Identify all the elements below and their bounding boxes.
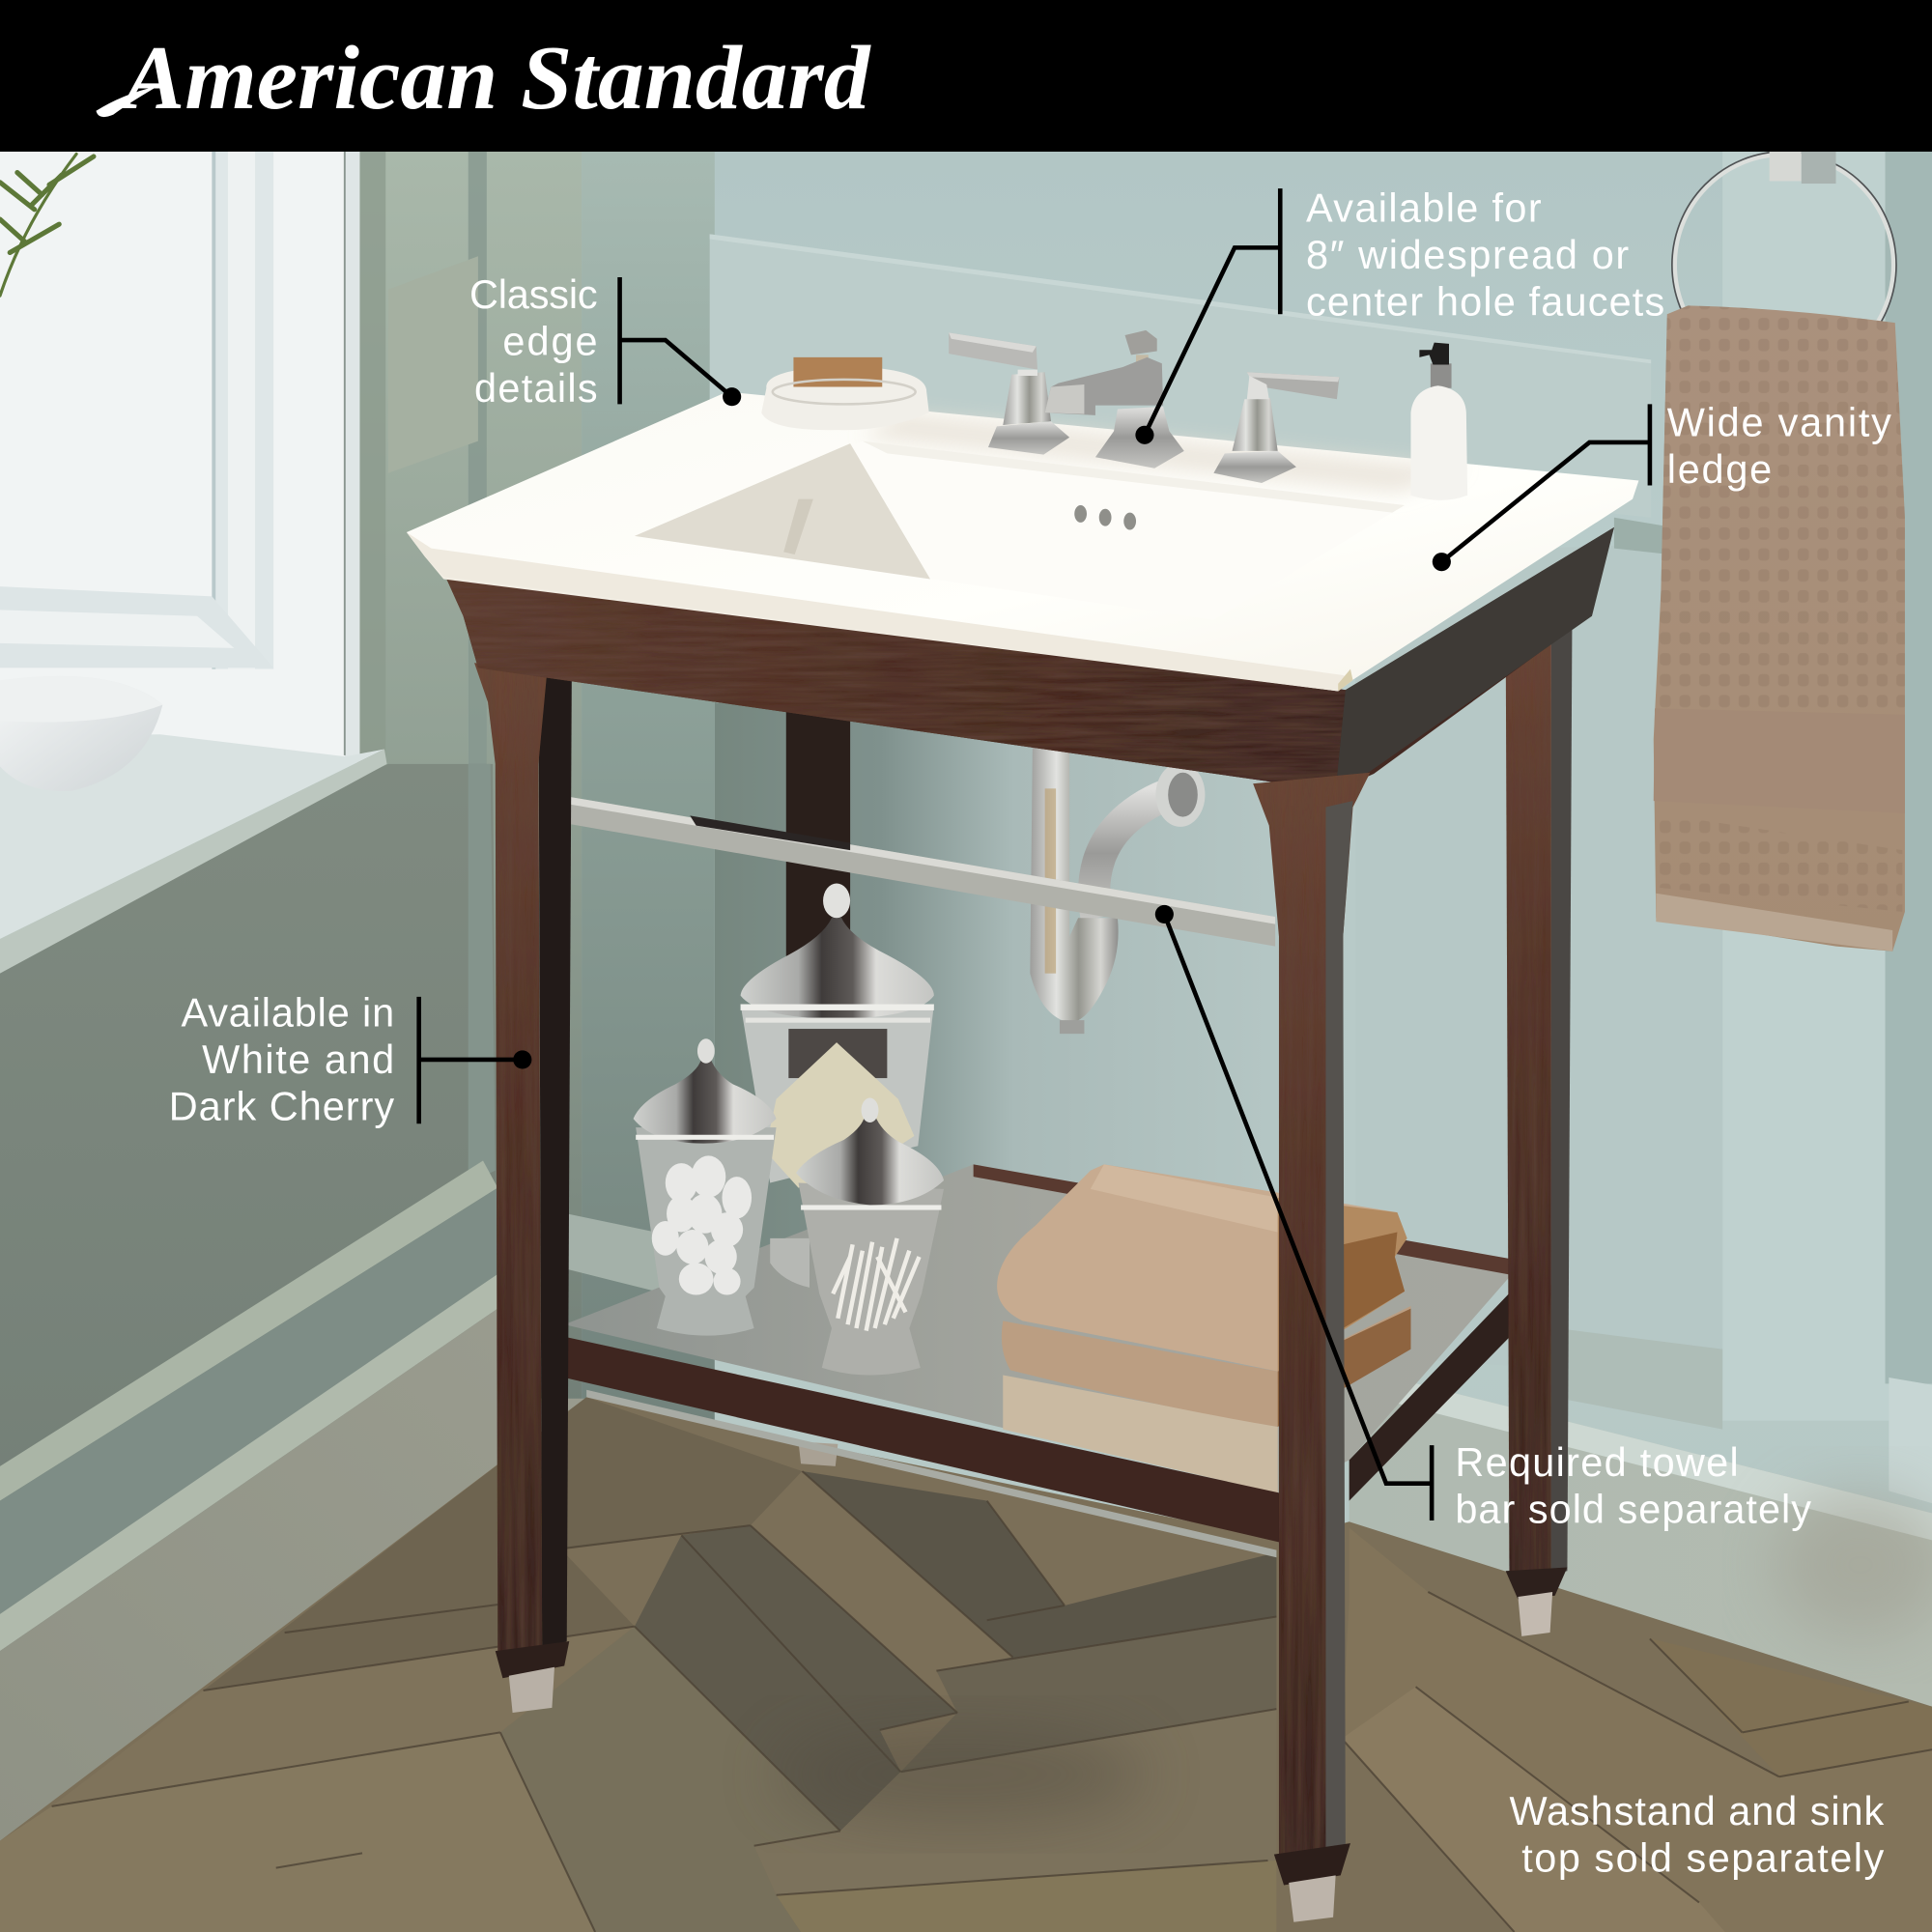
wall baseboard right: [1350, 1324, 1932, 1707]
front-right leg: [1253, 773, 1370, 1922]
panel: sink top: [407, 392, 1638, 692]
callout: finish colours: Dark Cherry: [169, 1083, 394, 1128]
note: sold separately: Washstand and sink: [1509, 1788, 1885, 1833]
note: sold separately: [1509, 1788, 1885, 1880]
callout: finish colours: [169, 989, 531, 1128]
hanging towel: [1654, 305, 1905, 952]
soap bottle: [1410, 343, 1467, 500]
callout: faucet options: Available for: [1306, 185, 1542, 231]
soap dish: [761, 357, 929, 430]
icon: bowl: [0, 676, 162, 791]
shelf: [549, 1164, 1525, 1557]
title: American Standard logo: American Standard: [118, 28, 871, 128]
icon: plant: [0, 154, 94, 296]
spout: [1045, 330, 1184, 469]
floor herringbone: [0, 1397, 1932, 1932]
callout: faucet options: center hole faucets: [1306, 279, 1664, 325]
jar: cotton swabs: [796, 1097, 944, 1375]
callout: classic edge details: Classic: [469, 271, 598, 317]
title: American Standard logo: [0, 0, 1932, 152]
jars and towels on shelf: [634, 884, 1410, 1427]
callout: classic edge details: details: [474, 365, 598, 411]
callout: classic edge details: [469, 271, 741, 411]
towels: [997, 1164, 1410, 1427]
callout: faucet options: [1135, 185, 1664, 444]
jar: cotton balls: [634, 1038, 777, 1336]
back-left leg: [786, 708, 850, 1466]
callout: finish colours: Available in: [182, 990, 394, 1036]
jar: large: [741, 884, 934, 1288]
towel bar: [545, 781, 1275, 947]
panel: wooden apron: [441, 527, 1614, 791]
panel: window sill: [0, 676, 387, 974]
callout: wide vanity ledge: ledge: [1667, 446, 1772, 492]
left handle: [949, 332, 1069, 455]
callout: finish colours: White and: [202, 1037, 394, 1082]
callout: faucet options: 8″ widespread or: [1306, 232, 1629, 277]
callout: wide vanity ledge: Wide vanity: [1667, 400, 1891, 445]
towel ring: [1672, 152, 1896, 379]
cotton-swab packet: [765, 1042, 914, 1188]
callout: wide vanity ledge: [1433, 400, 1891, 571]
right handle: [1213, 372, 1339, 483]
back-right leg: [1506, 604, 1573, 1636]
panel: lower-left wall: [0, 764, 715, 1932]
callout: towel bar: [1155, 905, 1811, 1532]
panel: window: [0, 152, 359, 757]
plumbing: sink trap: [1030, 747, 1205, 1034]
callout: towel bar: Required towel: [1455, 1439, 1739, 1485]
callout: towel bar: bar sold separately: [1455, 1487, 1811, 1532]
basin: [635, 441, 1405, 620]
front-left leg: [474, 663, 572, 1713]
callout: classic edge details: edge: [502, 318, 598, 363]
faucet handles and spout: [949, 330, 1339, 483]
note: sold separately: top sold separately: [1521, 1835, 1885, 1881]
